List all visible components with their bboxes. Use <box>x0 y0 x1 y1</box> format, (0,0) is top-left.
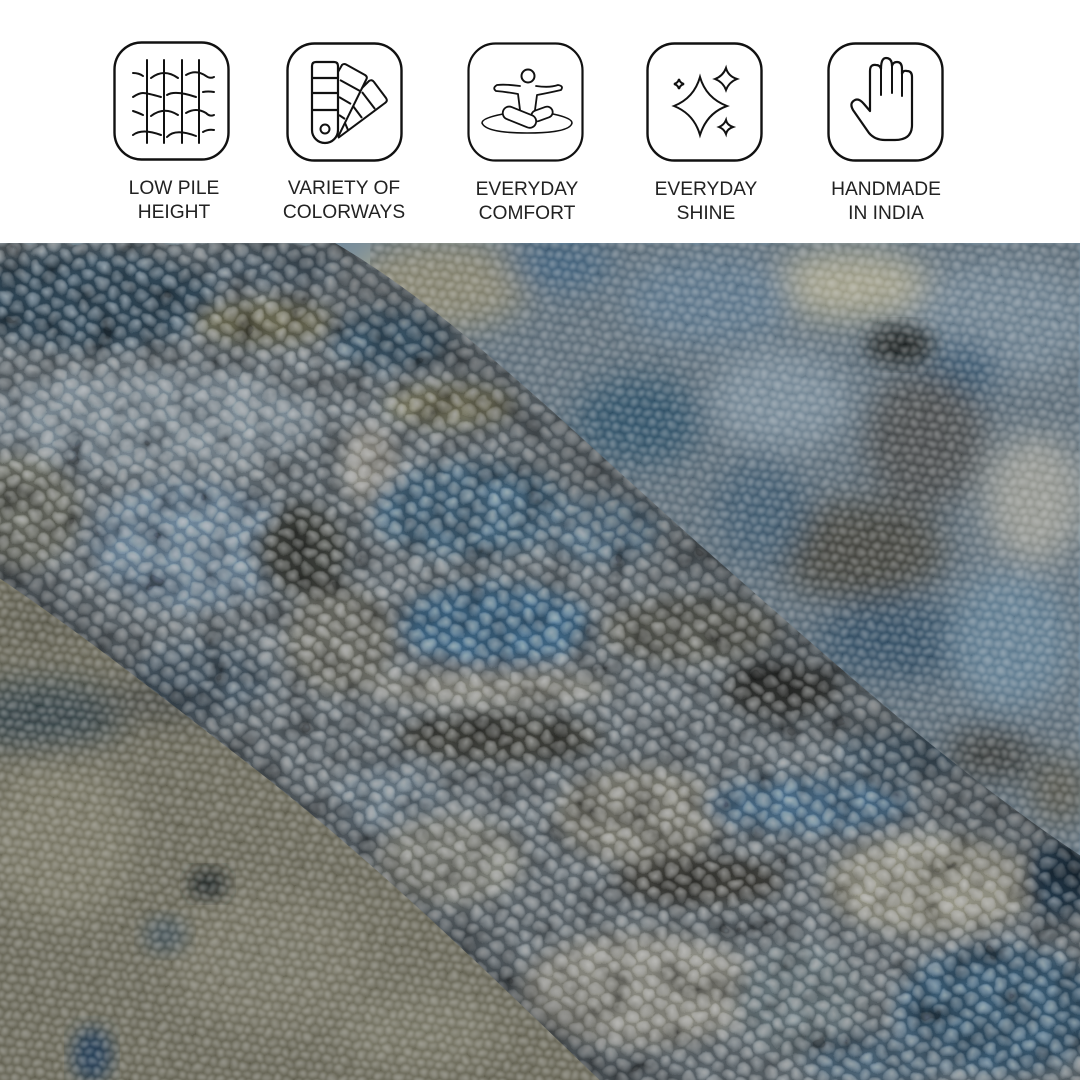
label: variety of colorways: COLORWAYS <box>283 202 405 223</box>
label: everyday shine: SHINE <box>677 203 735 224</box>
label: low pile height <box>129 178 219 223</box>
icon: handmade in india <box>827 42 944 162</box>
background: rug surface, olive lower left <box>0 560 640 1080</box>
icon: variety of colorways <box>286 42 403 162</box>
icon: everyday comfort <box>467 42 584 162</box>
label: variety of colorways <box>283 178 405 223</box>
icon: everyday shine <box>646 42 763 162</box>
photo: rolled rug close-up <box>0 243 1080 1080</box>
label: handmade in india: IN INDIA <box>848 203 924 224</box>
label: everyday shine: EVERYDAY <box>655 179 757 200</box>
label: low pile height: LOW PILE <box>129 178 219 199</box>
icon: low pile height <box>113 41 230 161</box>
label: handmade in india <box>831 179 941 224</box>
label: everyday comfort: EVERYDAY <box>476 179 578 200</box>
label: everyday comfort <box>476 179 578 224</box>
label: handmade in india: HANDMADE <box>831 179 941 200</box>
rolled rug band <box>0 243 1080 1080</box>
label: variety of colorways: VARIETY OF <box>288 178 400 199</box>
label: everyday shine <box>655 179 757 224</box>
label: low pile height: HEIGHT <box>138 202 210 223</box>
background: rug surface, blue upper right <box>0 240 1080 1080</box>
label: everyday comfort: COMFORT <box>479 203 575 224</box>
